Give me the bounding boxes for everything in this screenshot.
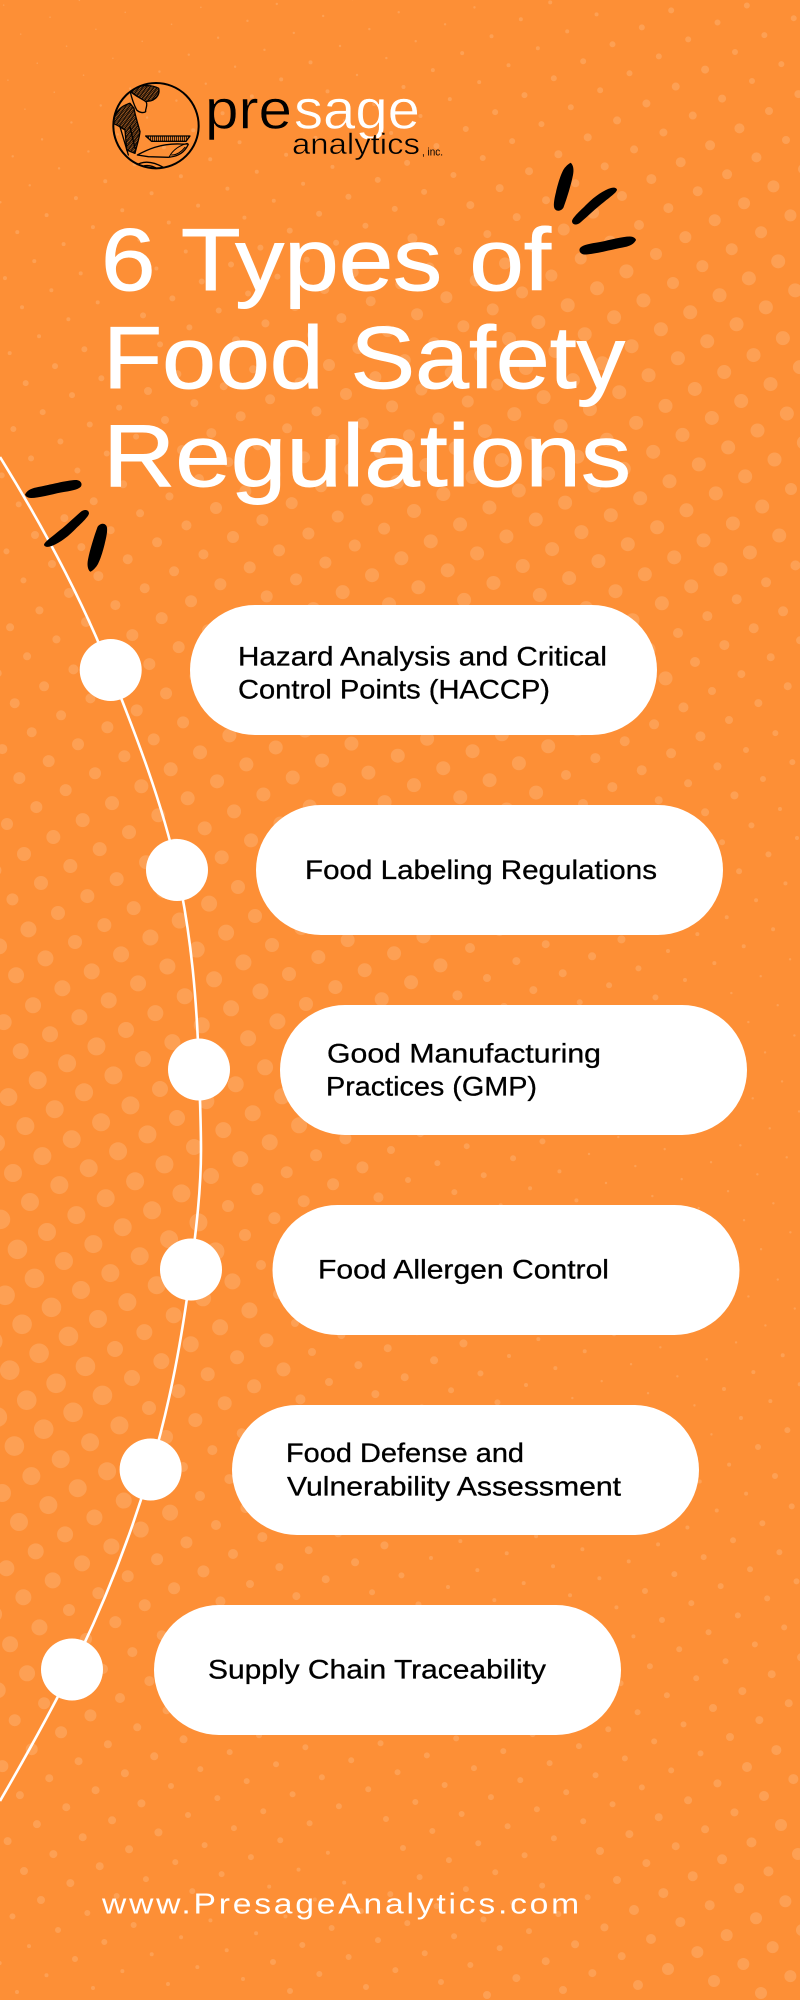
item 1: HACCP <box>80 605 657 735</box>
logo wordmark: analytics <box>292 128 420 161</box>
label 5: Food Defense and <box>286 1438 524 1468</box>
label 5: Vulnerability Assessment <box>287 1471 622 1501</box>
title: Food Safety <box>103 308 625 407</box>
item 5: food defense <box>120 1405 699 1535</box>
item 2: labeling <box>146 805 723 935</box>
label 1 <box>238 642 607 705</box>
pill 4 <box>272 1205 740 1335</box>
label 3 <box>326 1038 601 1102</box>
item 4: allergen <box>160 1205 740 1335</box>
label 1: Control Points (HACCP) <box>238 675 550 705</box>
logo emblem: figure holding a bowl inside a circle <box>113 83 199 169</box>
pill 1 <box>190 605 657 735</box>
pill 5 <box>232 1405 699 1535</box>
label 5 <box>286 1438 622 1501</box>
label 3: Practices (GMP) <box>326 1072 537 1102</box>
logo wordmark: , inc. <box>422 147 443 159</box>
title: Regulations <box>103 406 631 505</box>
curved timeline line <box>0 457 201 1801</box>
title: 6 Types of <box>101 210 552 309</box>
marker 2 <box>146 839 208 901</box>
pill 3 <box>280 1005 747 1135</box>
logo <box>113 77 443 169</box>
marker 5 <box>120 1438 182 1500</box>
item 3: GMP <box>168 1005 747 1135</box>
marker 1 <box>80 639 142 701</box>
marker 6 <box>41 1638 103 1700</box>
website url: www.PresageAnalytics.com <box>101 1889 582 1921</box>
label 3: Good Manufacturing <box>327 1038 601 1068</box>
item 6: traceability <box>41 1605 621 1735</box>
logo wordmark <box>205 77 443 161</box>
pill 2 <box>256 805 723 935</box>
label 1: Hazard Analysis and Critical <box>238 642 607 672</box>
logo wordmark: sage <box>294 77 420 140</box>
label 6: Supply Chain Traceability <box>208 1654 547 1684</box>
label 4: Food Allergen Control <box>318 1255 609 1285</box>
label 2: Food Labeling Regulations <box>305 855 657 885</box>
marker 3 <box>168 1038 230 1100</box>
logo wordmark: pre <box>205 77 292 140</box>
marker 4 <box>160 1238 222 1300</box>
icon: burst marks top right <box>554 163 636 255</box>
icon: burst marks left <box>25 480 107 572</box>
title <box>101 210 631 505</box>
pill 6 <box>154 1605 621 1735</box>
